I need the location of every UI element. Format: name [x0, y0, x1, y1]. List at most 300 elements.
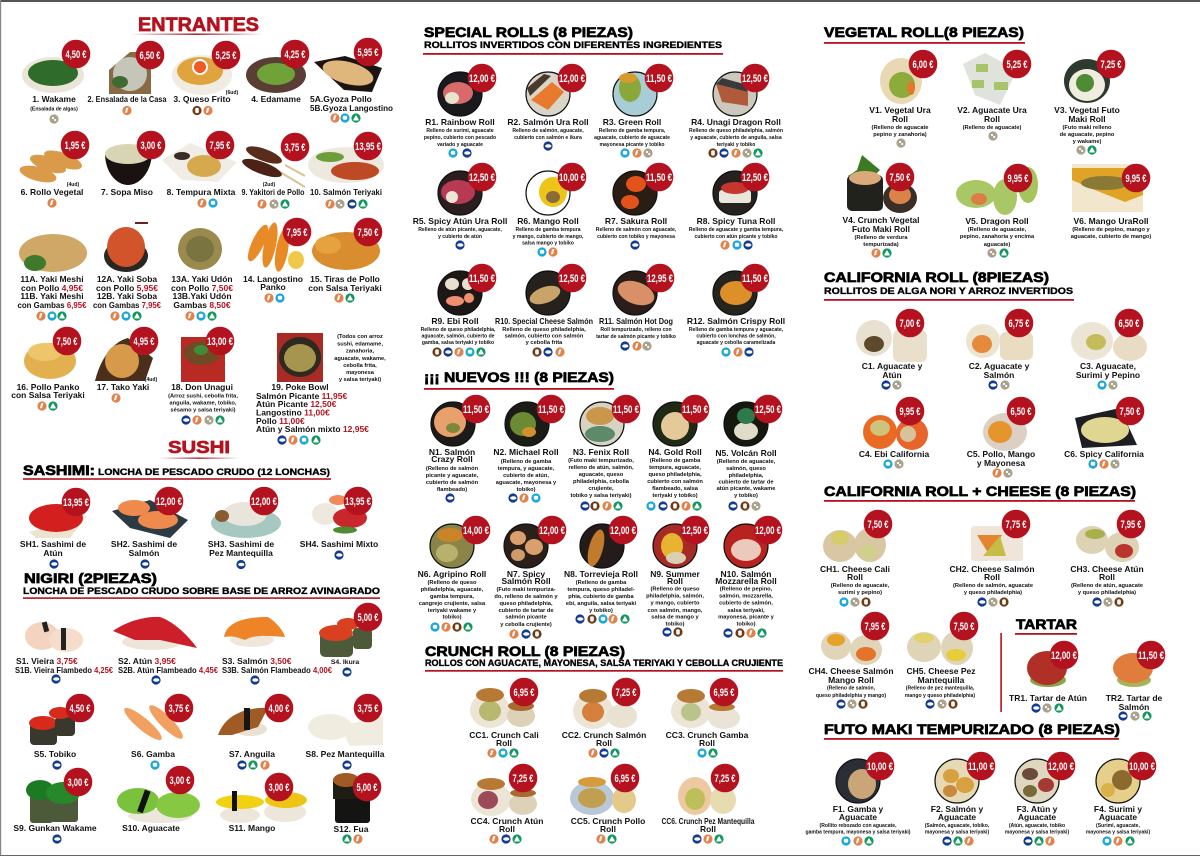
food: spicy salmon roll [504, 524, 548, 568]
prices: Pollo 11,00€ [256, 416, 305, 426]
food: crunch gamba roll [671, 689, 740, 729]
food: scallop nigiri [25, 621, 83, 652]
name [969, 361, 1030, 380]
name: surimi y pepino) [838, 590, 882, 596]
name: V1. Vegetal Ura [869, 105, 931, 115]
price: 10,00 € [1129, 761, 1155, 773]
food: tuna futo maki [1015, 759, 1059, 803]
name: R7. Sakura Roll [605, 216, 667, 226]
name: Aguacate [1018, 812, 1056, 822]
allergens [662, 627, 683, 637]
item: R10 [495, 264, 593, 357]
name [1086, 804, 1150, 836]
allergens [150, 760, 160, 770]
name [805, 804, 911, 836]
name: CH1. Cheese Cali [820, 564, 890, 574]
price: 5,25 € [216, 50, 236, 62]
name: R4. Unagi Dragon Roll [691, 117, 781, 127]
name [418, 569, 486, 620]
name [20, 539, 86, 558]
name: y mango, cubierto [651, 600, 700, 606]
name: Relleno de atún picante, aguacate, [418, 227, 502, 233]
item: V4 [842, 155, 920, 258]
price: 7,00 € [900, 318, 920, 330]
name [243, 274, 303, 292]
name: tempura, y aguacate, [498, 466, 555, 472]
name: tempura, queso philadel- [567, 587, 635, 593]
allergens [508, 493, 541, 503]
name: N4. Gold Roll [648, 447, 702, 457]
name: tempura, aguacate, [649, 465, 701, 471]
name: tartar de salmón picante y tobiko [596, 334, 676, 340]
item: N2 [493, 395, 565, 503]
item: S2 [113, 617, 218, 685]
item: 14 Langostino Panko [243, 218, 311, 303]
name: tempurizada) [863, 242, 899, 248]
item: 8 Tempura Mixta [162, 131, 237, 208]
name: anguila, wakame, tobiko, [169, 400, 237, 406]
allergens [728, 501, 761, 511]
name: S12. Fua [334, 824, 369, 834]
name: (Relleno de salmón [426, 466, 479, 472]
name: CC5. Crunch Pollo [571, 816, 645, 826]
name: 11A. Yaki Meshi [20, 274, 84, 284]
name: y tobiko) [589, 608, 613, 614]
name: cubierto de tartar de [718, 480, 774, 486]
food: avocado tuna california [856, 320, 927, 362]
name: R8. Spicy Tuna Roll [697, 216, 775, 226]
name: SH4. Sashimi Mixto [300, 539, 378, 549]
allergens [1097, 380, 1118, 390]
name [646, 569, 704, 628]
name: 5A.Gyoza Pollo [310, 94, 372, 104]
price: 5,25 € [1006, 59, 1028, 71]
price: 3,00 € [268, 782, 290, 794]
food: tuna tartar [1027, 651, 1067, 687]
name: Relleno de salmón, aguacate, [512, 128, 584, 134]
name: gamba tempura, mayonesa y salsa teriyaki) [805, 830, 911, 836]
allergens [47, 198, 57, 208]
item: CH4 [808, 612, 894, 709]
name: salsa de mango y [651, 614, 700, 620]
food: surimi futo maki [1096, 759, 1140, 803]
allergens [192, 106, 213, 115]
price: 4,00 € [268, 703, 290, 715]
allergens [52, 834, 62, 844]
item: 6 Rollo Vegetal [18, 131, 89, 208]
name [869, 105, 931, 138]
allergens [257, 199, 290, 209]
name [689, 216, 784, 240]
name [507, 117, 589, 141]
name: S7. Anguila [229, 749, 275, 759]
name: 12A. Yaki Soba [97, 274, 157, 284]
heading: SASHIMI: LONCHA DE PESCADO CRUDO (12 LONCHAS) [98, 467, 330, 477]
item: SH4 [300, 487, 378, 560]
price: 11,50 € [742, 273, 768, 285]
food: butterfish sashimi [211, 502, 281, 538]
price: 12,00 € [539, 525, 565, 537]
food: fried cheese plate [172, 55, 232, 95]
allergens [588, 748, 620, 758]
name: CH3. Cheese Atún [1070, 564, 1144, 574]
item: F3 [1005, 752, 1075, 846]
name: S6. Gamba [131, 749, 175, 759]
name: sésamo y salsa teriyaki) [170, 408, 236, 414]
allergens [580, 501, 623, 511]
name [1070, 564, 1144, 596]
name: y mango, cubierto de mango, [513, 234, 584, 240]
name: CH4. Cheese Salmón [808, 666, 894, 676]
item: TR2 [1106, 641, 1165, 721]
name: tobiko y salsa teriyaki) [570, 493, 632, 499]
name: S2. Atún 3,95€ [118, 656, 176, 666]
item: CC2 [562, 678, 646, 758]
name: N1. Salmón [429, 447, 475, 457]
item: F4 [1086, 752, 1156, 846]
name: variado y aguacate [437, 142, 483, 148]
name: CC3. Crunch Gamba [666, 730, 749, 740]
name [493, 447, 559, 493]
price: 4,25 € [284, 49, 306, 61]
food: salad [109, 52, 151, 94]
name: philadelphia, [729, 473, 764, 479]
food: spicy tuna ura roll [438, 171, 482, 215]
name [905, 666, 975, 699]
name: Crazy Roll [431, 454, 473, 464]
name [925, 804, 990, 836]
item: 13 Yaki Udon [171, 228, 233, 321]
name [820, 564, 890, 596]
name: (Relleno de gamba [576, 580, 627, 586]
name: picante y aguacate, [426, 473, 479, 479]
name: mayonesa, picante y [718, 614, 775, 620]
item: S6 [121, 694, 193, 770]
heading: VEGETAL ROLL: VEGETAL ROLL(8 PIEZAS) [824, 24, 1024, 40]
name: mayonesa y salsa teriyaki) [1005, 830, 1069, 836]
food: mango roll [526, 171, 570, 215]
name: S10. Aguacate [122, 823, 180, 833]
name [168, 382, 238, 414]
name [808, 666, 894, 699]
allergens [1076, 145, 1097, 155]
name: C1. Aguacate y [862, 361, 923, 371]
name: C6. Spicy California [1064, 449, 1144, 459]
food: vegetal ura roll [880, 58, 922, 104]
item: V5 [956, 164, 1038, 258]
price: 12,50 € [742, 73, 768, 85]
price: 7,25 € [1100, 59, 1122, 71]
price: 5,95 € [358, 47, 378, 59]
name: 8. Tempura Mixta [167, 187, 236, 197]
item: S10 [117, 766, 200, 833]
name: CC6. Crunch Pez Mantequilla [662, 816, 755, 826]
name: 13A. Yaki Udón [171, 274, 233, 284]
price: 12,00 € [156, 496, 182, 508]
food: torrevieja roll [580, 524, 624, 568]
item: 15 Tiras de Pollo [308, 218, 382, 303]
name: phia, cubierto de gamba [568, 594, 635, 600]
name: N2. Michael Roll [493, 447, 559, 457]
name [594, 117, 670, 148]
price: 9,95 € [1126, 173, 1146, 185]
name: Roll [847, 572, 863, 582]
name: cubierto con salmón e ikura [514, 135, 582, 141]
price: 6,00 € [912, 59, 934, 71]
name [118, 656, 218, 675]
price: 12,00 € [1051, 650, 1077, 662]
item: CH5 [905, 612, 978, 709]
price: 7,25 € [512, 773, 534, 785]
allergens [52, 760, 62, 770]
name: 5B.Gyoza Langostino [310, 103, 393, 113]
item: N10 [715, 516, 782, 638]
food: salmon futo maki [935, 759, 979, 803]
price: 3,00 € [140, 140, 162, 152]
allergens [543, 141, 553, 151]
name: mayonesa picante y tobiko [599, 142, 665, 148]
name: C3. Aguacate, [1080, 361, 1136, 371]
item: F2 [925, 752, 995, 846]
price: 11,50 € [469, 273, 495, 285]
name: (Relleno de pepino, mango y [1072, 227, 1151, 233]
price: 12,00 € [469, 73, 495, 85]
price: 11,50 € [613, 404, 639, 416]
item: 19 Poke Bowl [256, 333, 386, 445]
name: SH2. Sashimi de [111, 539, 177, 549]
name: aguacate, cubierto de aguacate [594, 135, 670, 141]
price: 13,00 € [207, 336, 233, 348]
item: R5 [413, 163, 507, 250]
name: tobiko) [443, 614, 462, 620]
name [308, 274, 382, 293]
food: tuna sashimi [29, 504, 87, 538]
name: salmón, queso [726, 466, 766, 472]
prices: 19. Poke Bowl [271, 382, 329, 392]
name: N8. Torrevieja Roll [564, 569, 638, 579]
food: spicy california tray [1075, 408, 1137, 448]
food: unagi dragon roll [713, 72, 757, 116]
name: 6. Rollo Vegetal [21, 187, 83, 197]
food: salmon crispy roll [713, 271, 757, 315]
heading: TARTAR: TARTAR [1016, 616, 1077, 632]
name: (Relleno de gamba [501, 459, 552, 465]
name: Gambas 8,50€ [173, 300, 231, 310]
name: 14. Langostino [243, 274, 303, 284]
name [495, 316, 593, 346]
allergens [1092, 597, 1124, 607]
item: R4 [689, 64, 783, 158]
heading: NIGIRI: NIGIRI (2PIEZAS) [24, 570, 157, 586]
allergens [342, 834, 363, 844]
name: cubierto con tobiko y mayonesa [597, 234, 675, 240]
heading: CRUNCH ROLL: CRUNCH ROLL (8 PIEZAS) [425, 643, 625, 659]
price: 7,95 € [210, 140, 230, 152]
price: 12,00 € [251, 496, 277, 508]
name [93, 274, 161, 310]
item: CC1 [469, 678, 539, 758]
item: N6 [418, 516, 490, 632]
name: CC2. Crunch Salmón [562, 730, 646, 740]
name: Salmón [984, 370, 1014, 380]
item: C6 [1064, 397, 1144, 469]
food: udon [178, 228, 222, 270]
name: 3. Queso Frito [173, 94, 231, 104]
name [426, 447, 479, 493]
heading: CALIFORNIA ROLL [824, 269, 1074, 301]
item: S9 [13, 768, 97, 844]
item: 11 Yaki Meshi [18, 234, 87, 321]
name: aguacate, salmón, cubierto de [421, 334, 495, 340]
name [513, 216, 584, 246]
item: R1 [424, 64, 496, 158]
name: relleno de atún, salmón, [568, 465, 634, 471]
name [842, 215, 920, 248]
name: philadelphia, cebolla [573, 479, 630, 485]
allergens [1088, 459, 1120, 469]
food: fenix roll [580, 402, 624, 446]
item: S5 [29, 694, 94, 770]
item: C4 [859, 397, 929, 469]
name: Roll [700, 824, 716, 834]
food: prawn nigiri [121, 701, 187, 744]
name [949, 564, 1035, 596]
name: 13B.Yaki Udón [172, 291, 232, 301]
name: S9. Gunkan Wakame [13, 823, 97, 833]
item: 5 Gyoza [310, 38, 393, 123]
heading: CALIFORNIA ROLL + CHEESE: CALIFORNIA ROLL + CHEESE (8 PIEZAS) [824, 483, 1136, 499]
name [15, 656, 113, 675]
name: CC1. Crunch Cali [469, 730, 539, 740]
name: 15. Tiras de Pollo [310, 274, 380, 284]
name: C4. Ebi California [859, 449, 929, 459]
item: TR1 [1009, 641, 1087, 713]
name: do, relleno de salmón y [494, 594, 558, 600]
price: 11,50 € [463, 404, 489, 416]
name: S4. Ikura [331, 659, 359, 666]
name: con Salsa Teriyaki [11, 390, 85, 400]
food: salmon sashimi [112, 500, 188, 538]
name: (Relleno de verdura [854, 235, 908, 241]
price: 12,50 € [469, 172, 495, 184]
name: (Arroz sushi, cebolla frita, [168, 394, 238, 400]
heading: SPECIAL ROLLS: SPECIAL ROLLS (8 PIEZAS) [424, 24, 633, 40]
name [647, 447, 703, 499]
food: wakame bowl [22, 57, 84, 93]
allergens [883, 459, 904, 469]
price: 3,00 € [170, 775, 190, 787]
allergens [334, 293, 355, 303]
name: aguacate, queso [579, 472, 624, 478]
item: CH2 [949, 510, 1035, 607]
heading: NIGIRI: LONCHA DE PESCADO CRUDO SOBRE BASE DE ARROZ AVINAGRADO [23, 586, 380, 596]
item: V1 [869, 50, 937, 148]
price: 12,00 € [755, 525, 781, 537]
food: chicken strips [312, 232, 380, 270]
name: 1. Wakame [32, 94, 76, 104]
item: 7 Sopa Miso [101, 131, 165, 197]
name: y queso philadelphia) [964, 590, 1022, 596]
food: dragon roll [956, 167, 1038, 215]
name: (Relleno de salmón, aguacate [953, 583, 1033, 589]
food: avocado salmon california [966, 324, 1033, 360]
name: Atún [43, 548, 63, 558]
name [471, 816, 543, 834]
food: special cheese salmon roll [526, 271, 570, 315]
allergens [537, 247, 558, 257]
name: (Relleno de salmón, [827, 686, 876, 692]
allergens [277, 435, 321, 445]
name [242, 182, 304, 197]
note: aguacate, wakame, [334, 356, 386, 362]
food: miso soup [105, 144, 152, 185]
name: (Relleno de queso [651, 586, 700, 592]
food: fried rice [19, 234, 87, 272]
name: (Relleno de queso [428, 580, 477, 586]
note: zanahoria, [346, 348, 374, 354]
allergens [455, 240, 465, 250]
name: (Salmón, aguacate, tobiko, [925, 823, 990, 829]
food: salmon crazy roll [431, 402, 475, 446]
name: Aguacate [1099, 812, 1137, 822]
allergens [197, 198, 218, 208]
item: R3 [594, 64, 673, 158]
price: 6,50 € [1118, 318, 1140, 330]
name: (Relleno de pez mantequilla, [906, 686, 975, 692]
name [222, 656, 332, 675]
price: 4,50 € [66, 49, 86, 61]
food: green roll [613, 72, 657, 116]
allergens [37, 401, 58, 411]
name: Mango Roll [828, 675, 874, 685]
allergens [708, 148, 763, 158]
name: V4. Crunch Vegetal [842, 215, 920, 225]
allergens [723, 628, 767, 638]
name: philadelphia, salmón, [646, 594, 704, 600]
food: cheese cali roll [823, 528, 886, 562]
name: cubierto de atún, [503, 473, 549, 479]
price: 12,50 € [755, 404, 781, 416]
name: V2. Aguacate Ura [957, 105, 1027, 115]
price: 12,50 € [682, 525, 708, 537]
price: 12,95 € [647, 273, 673, 285]
food: cheese butterfish roll [907, 631, 973, 665]
item: C3 [1071, 309, 1147, 390]
food: panko chicken [24, 343, 76, 379]
name: N3. Fenix Roll [573, 447, 629, 457]
name: y cubierto de atún [438, 234, 482, 240]
food: eel nigiri [218, 708, 268, 736]
item: CC6 [662, 764, 755, 844]
name: S5. Tobiko [34, 749, 76, 759]
item: CC3 [666, 678, 749, 758]
name: Roll [984, 114, 1000, 124]
name: aguacate y cebolla caramelizada [697, 340, 776, 346]
name: Roll [984, 572, 1000, 582]
name: (4ud) [67, 182, 80, 188]
name [957, 105, 1027, 131]
name: cubierto con salmón [647, 479, 703, 485]
price: 9,95 € [900, 406, 920, 418]
name: S1B. Vieira Flambedo 4,25€ [15, 665, 113, 675]
item: C2 [966, 309, 1033, 390]
allergens [236, 560, 246, 569]
food: spicy tuna roll [713, 171, 757, 215]
name: Salmón [1119, 702, 1149, 712]
name: 11B. Yaki Meshi [20, 291, 84, 301]
name: (Relleno de aguacate, [831, 583, 890, 589]
name: Mantequilla [918, 675, 965, 685]
